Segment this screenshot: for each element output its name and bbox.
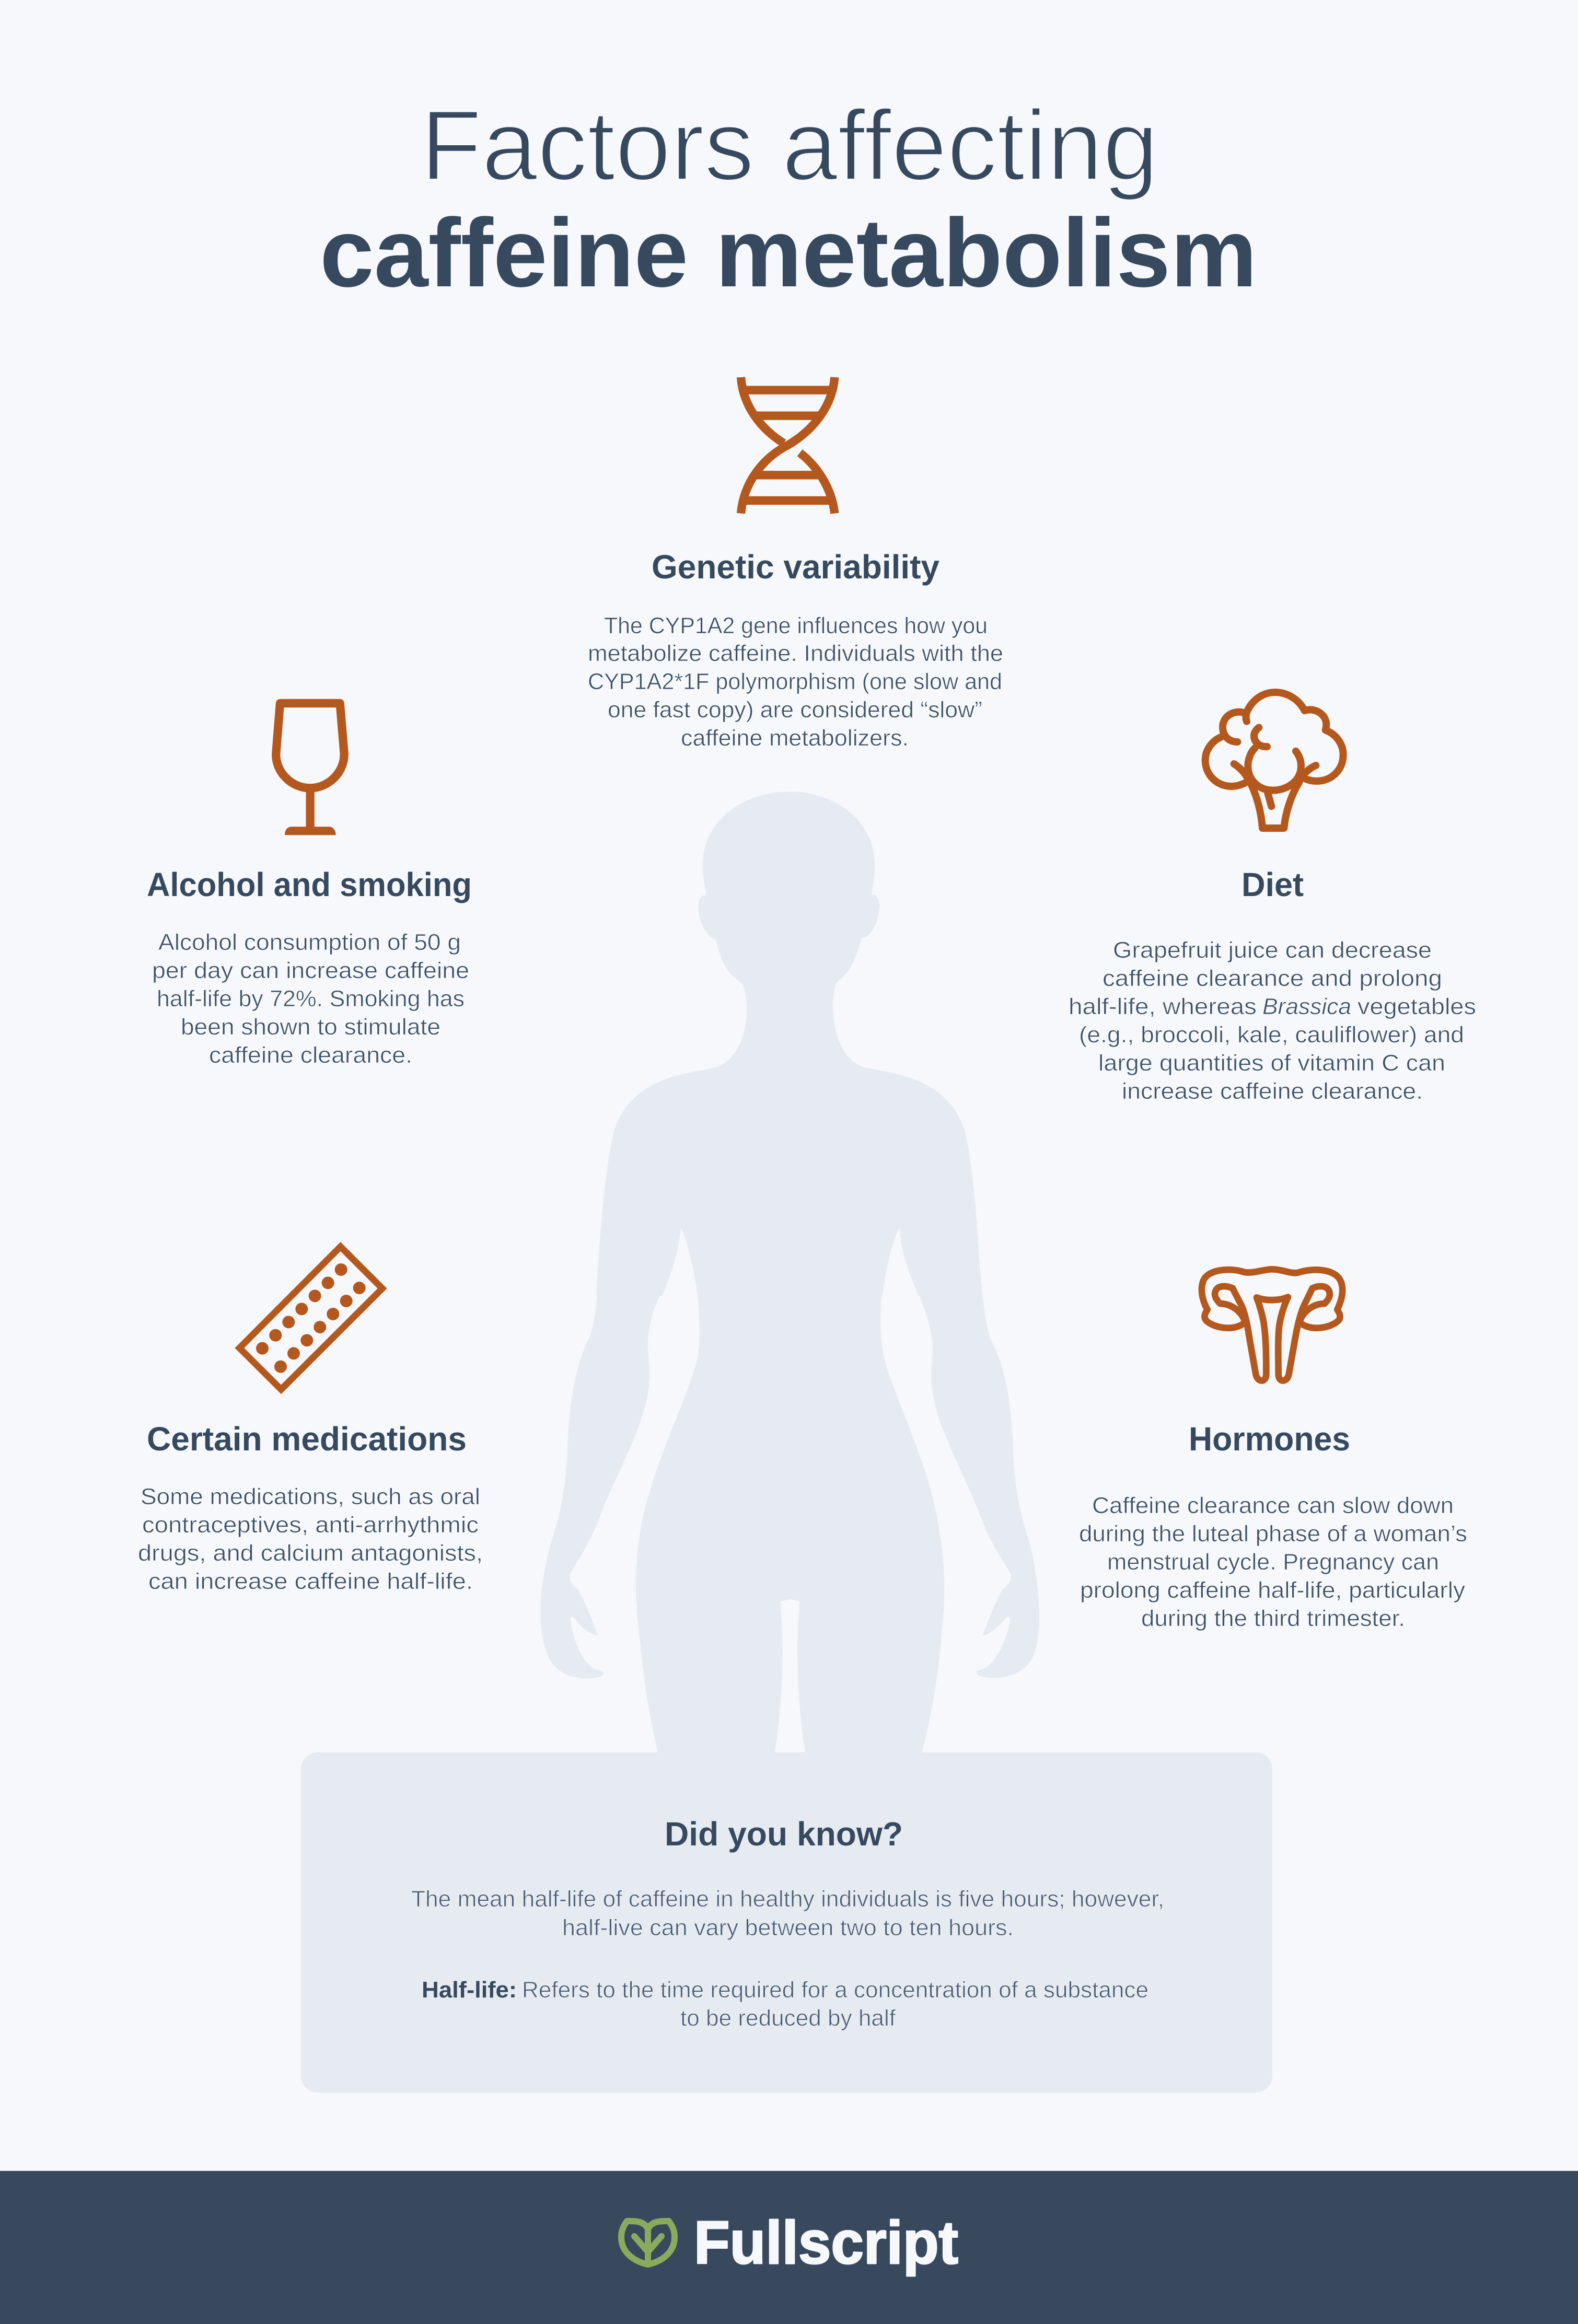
text: hormones body: during the third trimester. [1141, 1606, 1405, 1631]
logo wordmark: Fullscript [694, 2209, 958, 2276]
text: diet body: increase caffeine clearance. [1122, 1078, 1423, 1104]
title: Factors affecting [421, 90, 1158, 201]
icon: Fullscript leaf logo [621, 2221, 675, 2264]
text: alcohol and smoking body: been shown to stimulate [181, 1014, 440, 1040]
text: alcohol and smoking body: caffeine clearance. [209, 1042, 412, 1068]
text: diet body: caffeine clearance and prolong [1103, 966, 1442, 991]
text: alcohol and smoking body [152, 929, 469, 1068]
text: genetic variability body [588, 613, 1003, 751]
text: diet body [1069, 937, 1476, 1104]
title [320, 90, 1257, 307]
text: alcohol and smoking body: half-life by 72%. Smoking has [157, 986, 465, 1012]
text: diet body: (e.g., broccoli, kale, cauliflower) and [1079, 1022, 1464, 1048]
text: genetic variability body: one fast copy) are considered “slow” [608, 697, 982, 723]
text: alcohol and smoking body: per day can increase caffeine [152, 958, 469, 983]
text: diet body: vegetables [1357, 994, 1476, 1019]
text: half-life facts: Refers to the time required for a concentration of a substance [522, 1977, 1148, 2003]
panel: diet [1069, 692, 1476, 1104]
text: genetic variability body: metabolize caffeine. Individuals with the [588, 641, 1003, 666]
icon: wine glass [276, 703, 344, 835]
text: half-life facts: to be reduced by half [680, 2005, 896, 2031]
text: genetic variability body: CYP1A2*1F polymorphism (one slow and [588, 669, 1002, 694]
text: alcohol and smoking body: Alcohol consumption of 50 g [158, 929, 461, 955]
heading: diet: Diet [1241, 866, 1304, 903]
text: hormones body: Caffeine clearance can slow down [1092, 1493, 1454, 1518]
text: half-life facts: Half-life: [422, 1977, 517, 2003]
text: half-life facts: half-live can vary between two to ten hours. [562, 1915, 1014, 1940]
heading: hormones: Hormones [1189, 1420, 1350, 1458]
text: certain medications body [138, 1484, 483, 1594]
text: half-life facts: The mean half-life of caffeine in healthy individuals is five hours; however, [411, 1886, 1164, 1912]
text: certain medications body: contraceptives, anti-arrhythmic [142, 1512, 479, 1538]
body silhouette [540, 792, 1039, 1767]
text: certain medications body: drugs, and calcium antagonists, [138, 1540, 483, 1566]
text: genetic variability body: The CYP1A2 gene influences how you [604, 613, 988, 638]
text: diet body: Brassica [1262, 994, 1351, 1019]
panel: genetic variability [588, 377, 1003, 751]
text: hormones body: prolong caffeine half-life, particularly [1080, 1577, 1465, 1603]
icon: broccoli [1205, 692, 1343, 828]
panel: certain medications [138, 1247, 483, 1594]
footer band [0, 2171, 1578, 2324]
text: diet body: Grapefruit juice can decrease [1113, 937, 1432, 963]
text: diet body: half-life, whereas [1069, 994, 1257, 1019]
heading: certain medications: Certain medications [147, 1420, 467, 1458]
text: diet body: large quantities of vitamin C can [1098, 1050, 1445, 1076]
icon: pill blister pack [239, 1247, 382, 1389]
heading: did you know: Did you know? [665, 1815, 903, 1853]
icon: DNA helix [741, 377, 834, 514]
text: hormones body: during the luteal phase of a woman’s [1079, 1521, 1467, 1547]
heading: alcohol and smoking: Alcohol and smoking [147, 866, 472, 903]
text: genetic variability body: caffeine metabolizers. [681, 725, 909, 751]
text: hormones body [1079, 1493, 1467, 1631]
text: hormones body: menstrual cycle. Pregnancy can [1107, 1549, 1439, 1575]
panel: hormones [1079, 1269, 1467, 1631]
heading: genetic variability: Genetic variability [652, 548, 939, 586]
title: caffeine metabolism [320, 199, 1257, 307]
text: half-life facts [411, 1886, 1164, 2031]
icon: uterus [1202, 1269, 1342, 1380]
text: certain medications body: can increase caffeine half-life. [148, 1568, 473, 1594]
panel: alcohol and smoking [147, 703, 472, 1068]
text: certain medications body: Some medications, such as oral [141, 1484, 480, 1509]
panel: did you know [301, 1752, 1272, 2093]
